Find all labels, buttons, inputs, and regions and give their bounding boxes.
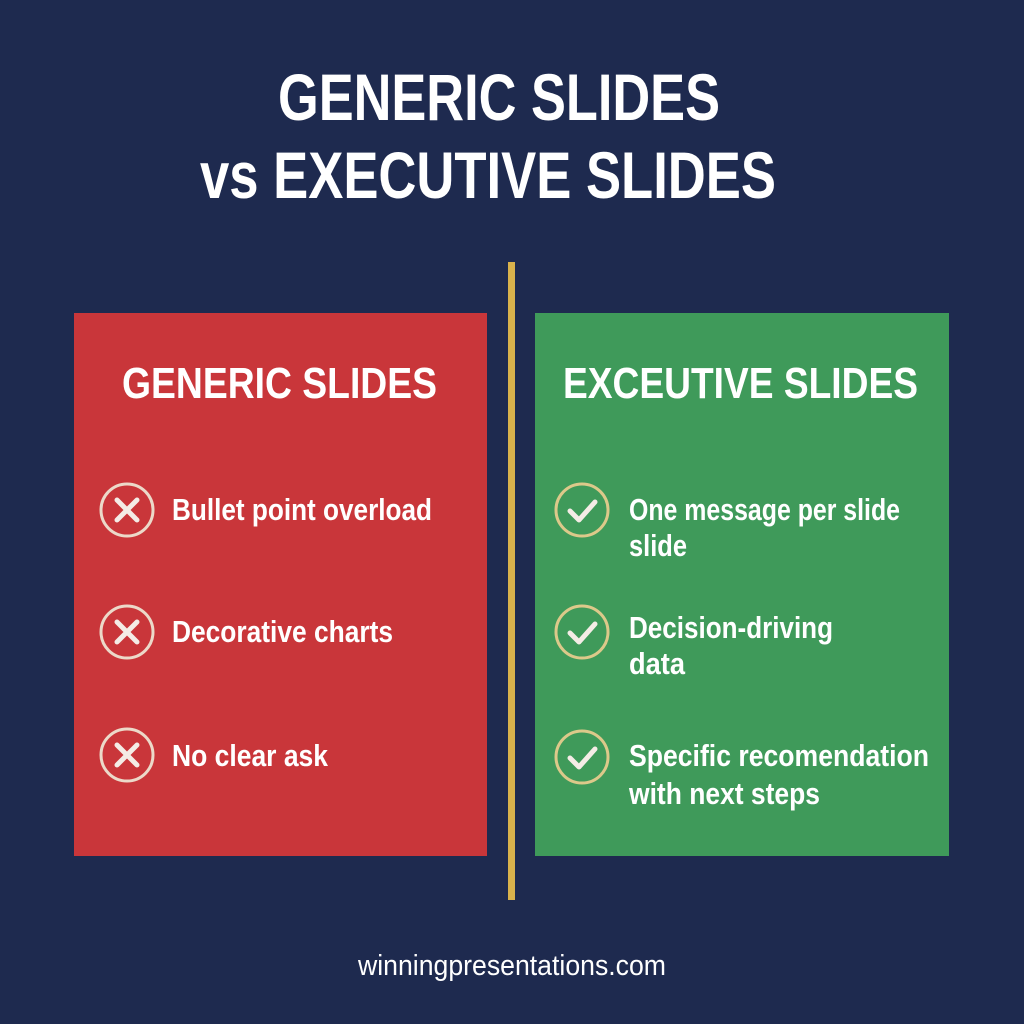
item: decision-driving data	[556, 606, 833, 681]
panel heading: generic: GENERIC SLIDES	[122, 359, 437, 408]
item: decorative charts	[101, 606, 393, 658]
title: vs EXECUTIVE SLIDES	[200, 138, 776, 212]
divider line	[508, 262, 515, 900]
item: bullet point overload: Bullet point overload	[172, 492, 432, 527]
item: one message per slide	[556, 484, 900, 563]
item: decorative charts: Decorative charts	[172, 614, 393, 649]
item: decision-driving data: data	[629, 646, 686, 681]
title	[200, 60, 776, 212]
panel: generic slides	[74, 313, 487, 856]
item: specific recommendation: with next steps	[628, 776, 820, 811]
panel heading: executive: EXCEUTIVE SLIDES	[563, 359, 918, 408]
title: GENERIC SLIDES	[278, 60, 720, 134]
item: no clear ask	[101, 729, 329, 781]
item: specific recommendation: Specific recomendation	[629, 738, 929, 773]
item: specific recommendation	[556, 731, 929, 811]
panel: executive slides	[535, 313, 949, 856]
item: decision-driving data: Decision-driving	[629, 610, 833, 645]
item: one message per slide: One message per slide	[629, 492, 900, 527]
item: one message per slide: slide	[629, 528, 687, 563]
item: no clear ask: No clear ask	[172, 738, 329, 773]
footer: winningpresentations.com	[357, 950, 666, 982]
item: bullet point overload	[101, 484, 432, 536]
